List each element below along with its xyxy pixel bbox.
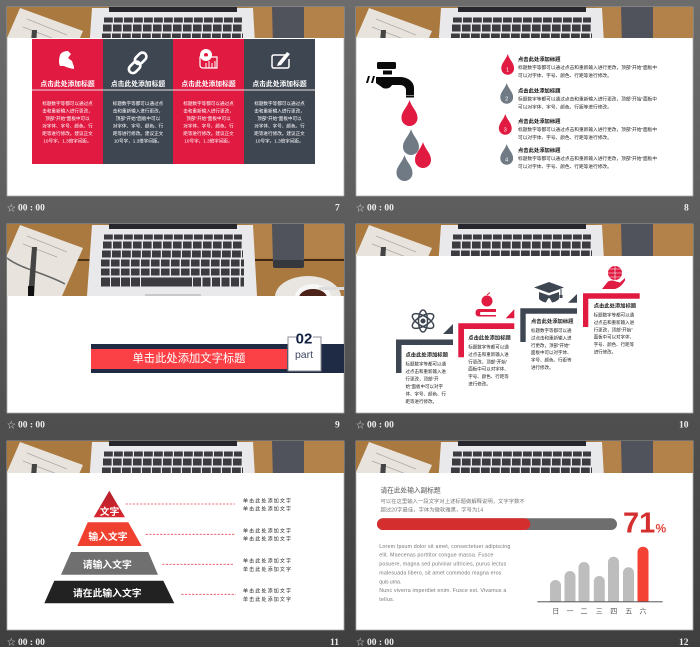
pyramid tier 2 (77, 522, 142, 546)
card 2 heading: 点击此处添加标题 (111, 79, 165, 88)
list item 1: 点击此处添加标题 (518, 55, 561, 63)
card 3 body: 标题数字等都可以通过点 (183, 100, 234, 107)
header photo (356, 224, 693, 256)
step 1 body: 标题数字等都可以通 (406, 360, 446, 368)
step 4 body: 过点击和重新输入进 (594, 319, 635, 326)
pyramid tier 1: 文字 (100, 505, 119, 518)
card 1 body: 顶部“开始”面板中可以 (45, 115, 90, 122)
step 2 body: 进行修改。 (468, 380, 491, 388)
footer slide 10: ☆ (356, 420, 365, 430)
percent value: % (656, 522, 666, 536)
step 3 body: 行更改，顶部“开始” (531, 342, 570, 349)
card 3 body: 距等进行修改。建议正文 (183, 130, 234, 137)
axis labels: 三 (596, 608, 603, 616)
step 1 body: 过点击和重新输入进 (406, 368, 446, 375)
gray drop falling (403, 129, 419, 155)
list item 2: 标题数字等都可以通过点击和重新输入进行更改，顶部“开始”面板中 (518, 96, 657, 102)
card 3 heading: 点击此处添加标题 (181, 79, 236, 88)
lorem paragraph: tellus. (379, 597, 394, 603)
panel: card 4 (244, 39, 315, 164)
list item 2: 2 (505, 96, 508, 102)
card 1 body: 10号字，1.3倍字间距。 (43, 138, 92, 144)
lorem paragraph: Lorem Ipsum dolor sit amet, consectetuer adipiscing (379, 544, 510, 550)
panel: card 2 (103, 39, 173, 164)
step 1 body: 始”面板中可以对字 (406, 383, 443, 390)
step 1 body: 距等进行修改。 (406, 398, 437, 405)
footer slide 10 (356, 420, 689, 430)
list item 3: 3 (504, 128, 507, 134)
progress bar (377, 518, 617, 530)
list item 2: 可以对字体、字号、颜色、行距等进行修改。 (518, 104, 612, 110)
slide 9: section divider (7, 224, 344, 413)
step 4 body: 字号、颜色、行距等 (594, 341, 635, 348)
lorem paragraph: quis urna. (379, 580, 401, 586)
axis labels: 二 (580, 608, 588, 616)
list item 3: 标题数字等都可以通过点击和重新输入进行更改，顶部“开始”面板中 (518, 126, 657, 133)
list item 4: 4 (505, 158, 508, 164)
step 3 body: 进行修改。 (531, 364, 554, 371)
footer slide 10: 00 : 00 (367, 420, 394, 430)
step 4 body: 行更改，顶部“开始” (594, 326, 633, 333)
footer slide 7: 7 (335, 204, 340, 214)
icon: chain link (127, 51, 148, 75)
part badge (288, 330, 321, 371)
axis labels: 一 (566, 608, 574, 616)
slide 7: four column cards (7, 7, 344, 196)
card 2 body: 距等进行修改。建议正文 (113, 130, 164, 137)
card 1 body: 距等进行修改。建议正文 (42, 130, 93, 137)
footer slide 7: 00 : 00 (18, 204, 45, 214)
lorem paragraph (379, 544, 510, 603)
footer slide 10: 10 (679, 420, 689, 430)
list item 1 (501, 54, 657, 79)
step 4 (583, 266, 640, 327)
tier label 3: 单击此处添加文字 (243, 558, 292, 565)
pyramid tier 3 (61, 552, 158, 575)
list item 1: 标题数字等都可以通过点击和重新输入进行更改，顶部“开始”面板中 (518, 64, 657, 71)
axis labels: 日 (552, 608, 559, 616)
step 1 body: 行更改，顶部“开 (406, 376, 439, 382)
pyramid tier 2: 输入文字 (88, 530, 128, 543)
footer slide 12 (356, 637, 689, 647)
card 4 heading: 点击此处添加标题 (252, 79, 307, 88)
list item 2 (500, 83, 657, 110)
footer slide 9: ☆ (7, 420, 16, 430)
card 3 body: 击和重新输入进行更改， (183, 108, 234, 114)
list item 3: 可以对字体、字号、颜色、行距等进行修改。 (518, 134, 612, 141)
card 2 body: 标题数字等都可以通过点 (113, 100, 164, 107)
section title: 单击此处添加文字标题 (133, 351, 245, 365)
step 3 (520, 282, 577, 342)
description: 可以在这里输入一段文字对上述标题做解释说明，文字字数不 (380, 497, 525, 505)
tier label 2: 单击此处添加文字 (243, 536, 292, 543)
icon: apple on books (476, 292, 496, 316)
footer slide 7 (7, 203, 340, 214)
card 3 body: 顶部“开始”面板中可以 (186, 115, 231, 122)
list item 3: 点击此处添加标题 (518, 117, 561, 125)
step 3 body: 标题数字等都可以通 (531, 327, 572, 334)
tier label 1: 单击此处添加文字 (243, 497, 292, 504)
card 4 body: 顶部“开始”面板中可以 (257, 115, 302, 122)
step 4 body: 进行修改。 (594, 348, 616, 356)
part label: part (295, 349, 313, 361)
red drop lower (415, 142, 431, 168)
card 2 body: 对字体、字号、颜色、行 (113, 122, 164, 130)
step 2 body: 行更改，顶部“开始” (468, 358, 508, 365)
icon: flexed arm (59, 51, 74, 69)
subtitle: 请在此处输入副标题 (380, 486, 441, 494)
step 2 body: 字号、颜色、行距等 (468, 373, 509, 380)
pyramid tier 3: 请输入文字 (83, 558, 132, 571)
panel: card 3 (173, 39, 244, 164)
step 3 body: 过点击和重新输入进 (531, 334, 572, 341)
step 2 body: 面板中可以对字体、 (468, 366, 509, 373)
section number: 02 (296, 330, 312, 348)
list item 4: 点击此处添加标题 (518, 146, 561, 154)
footer slide 9 (7, 420, 340, 430)
card 1 body: 对字体、字号、颜色、行 (42, 122, 93, 130)
lorem paragraph: malesuada libero, sit amet commodo magna eros (379, 570, 502, 576)
header photo (356, 7, 693, 38)
header photo (7, 7, 344, 38)
icon: hand holding globe (602, 266, 625, 289)
footer slide 8 (356, 203, 689, 214)
card 2 body: 10号字，1.3倍字间距。 (114, 138, 162, 144)
footer slide 8: ☆ (356, 203, 365, 213)
card 3 body: 对字体、字号、颜色、行 (183, 122, 234, 130)
footer slide 8: 8 (684, 204, 689, 214)
tier label 2: 单击此处添加文字 (243, 527, 292, 534)
red drop falling (402, 100, 418, 126)
list item 4: 标题数字等都可以通过点击和重新输入进行更改，顶部“开始”面板中 (518, 155, 657, 162)
card 1 heading: 点击此处添加标题 (40, 79, 95, 88)
axis labels: 六 (640, 606, 646, 616)
footer slide 7: ☆ (7, 203, 16, 213)
tier label 4: 单击此处添加文字 (243, 588, 292, 595)
card 4 body: 距等进行修改。建议正文 (254, 130, 305, 137)
header photo (7, 441, 344, 473)
card 2 body: 击和重新输入进行更改， (113, 108, 163, 114)
card 1 body: 击和重新输入进行更改， (42, 108, 93, 114)
connector lines (126, 504, 236, 594)
icon: atom (410, 310, 436, 332)
step 2 (458, 292, 514, 357)
footer slide 9: 9 (335, 420, 340, 430)
card 3 body: 10号字，1.3倍字间距。 (184, 138, 233, 144)
slide 12: progress and bars (356, 441, 693, 630)
slide 8: tap and drops (356, 7, 693, 196)
description: 超过20字最佳，字体为微软雅黑，字号为14 (380, 506, 483, 514)
header photo (356, 441, 693, 473)
step 4 heading: 点击此处添加标题 (594, 302, 637, 310)
list item 1: 可以对字体、字号、颜色、行距等进行修改。 (518, 72, 612, 79)
pyramid tier 4 (44, 581, 174, 603)
card 2 body: 顶部“开始”面板中可以 (116, 115, 161, 122)
bar chart (537, 547, 663, 616)
footer slide 12: ☆ (356, 637, 365, 647)
lorem paragraph: Nunc viverra imperdiet enim. Fusce est. Vivamus a (379, 588, 506, 594)
slide 11: pyramid (7, 441, 344, 630)
list item 4 (500, 144, 657, 170)
icon: water tap (366, 62, 414, 98)
percent value: 71 (623, 508, 655, 540)
footer slide 11: ☆ (7, 637, 16, 647)
tier label 1: 单击此处添加文字 (243, 506, 292, 513)
footer slide 9: 00 : 00 (18, 420, 45, 430)
list item 4: 可以对字体、字号、颜色、行距等进行修改。 (518, 163, 612, 170)
card 4 body: 标题数字等都可以通过点 (254, 100, 305, 107)
gray drop lower (396, 155, 412, 181)
step 4 body: 标题数字等都可以通 (594, 312, 635, 318)
list item 1: 1 (506, 68, 509, 74)
axis labels: 五 (625, 608, 632, 616)
pyramid tier 4: 请在此输入文字 (73, 586, 142, 600)
footer slide 8: 00 : 00 (367, 204, 394, 214)
pyramid tier 1 (94, 491, 125, 518)
card 4 body: 10号字，1.3倍字间距。 (255, 138, 304, 144)
icon: graduation cap (534, 282, 564, 302)
card 4 body: 对字体、字号、颜色、行 (254, 122, 305, 130)
step 4 body: 面板中可以对字体、 (594, 334, 634, 341)
step 2 heading: 点击此处添加标题 (468, 334, 511, 342)
panel: card 1 (32, 39, 103, 164)
slide 10: staircase (356, 224, 693, 413)
axis labels: 四 (610, 608, 617, 616)
step 3 body: 面板中可以对字体、 (531, 349, 572, 356)
step 1 (396, 310, 453, 373)
step 2 body: 过点击和重新输入进 (468, 351, 509, 358)
tier label 3: 单击此处添加文字 (243, 566, 292, 573)
navy title band (91, 344, 344, 373)
card 4 body: 击和重新输入进行更改， (254, 108, 305, 114)
header photo (7, 224, 344, 296)
axis labels (552, 606, 646, 616)
lorem paragraph: elit. Maecenas porttitor congue massa. Fusce (379, 552, 493, 558)
card 1 body: 标题数字等都可以通过点 (42, 100, 93, 107)
step 3 heading: 点击此处添加标题 (531, 317, 574, 325)
list item 2: 点击此处添加标题 (518, 86, 561, 94)
step 1 text: 点击此处添加标题 (406, 350, 449, 358)
step 2 body: 标题数字等都可以通 (468, 344, 509, 350)
list item 3 (499, 114, 657, 141)
icon: tape measure (200, 49, 217, 68)
lorem paragraph: posuere, magna sed pulvinar ultricies, purus lectus (379, 562, 507, 568)
step 3 body: 字号、颜色、行距等 (531, 357, 572, 364)
tier label 4: 单击此处添加文字 (243, 596, 292, 603)
step 1 body: 体、字号、颜色、行 (406, 390, 446, 398)
icon: edit note (272, 52, 290, 68)
red title bar (91, 349, 287, 369)
footer slide 11 (7, 637, 339, 647)
